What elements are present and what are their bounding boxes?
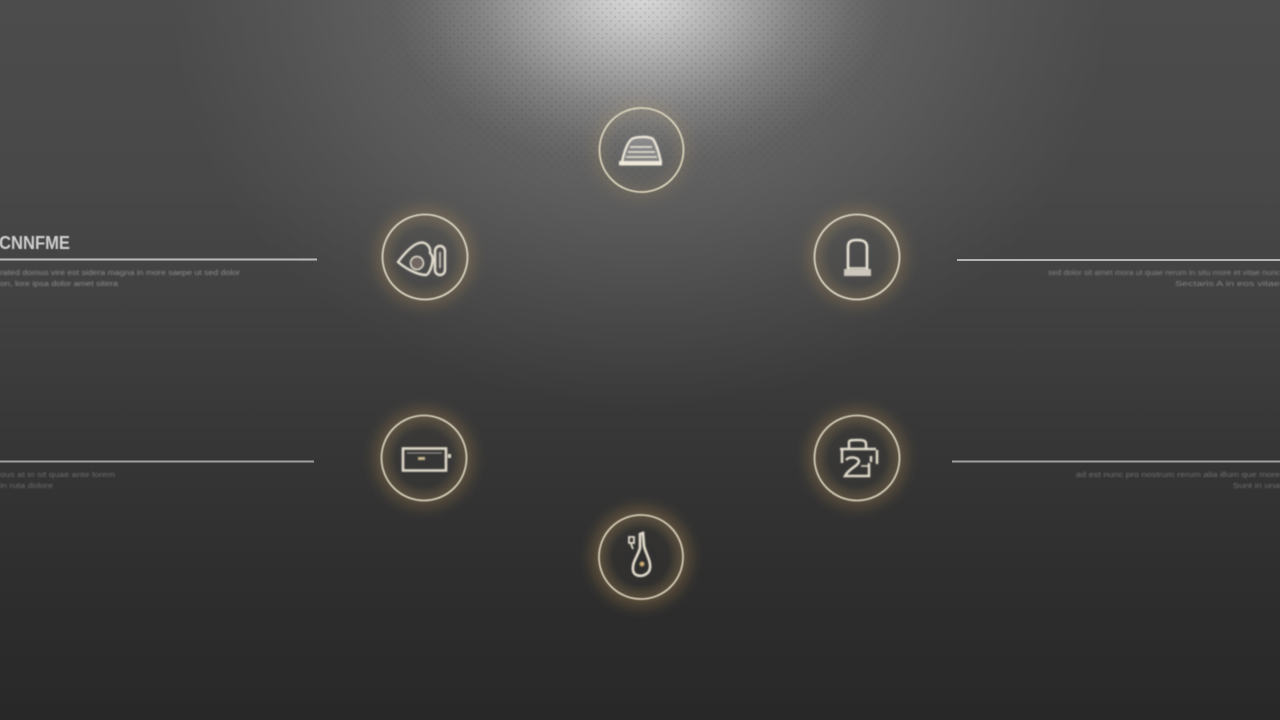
panel: top-right text <box>957 259 1280 288</box>
body text <box>0 270 241 288</box>
body text <box>0 472 115 490</box>
divider line left upper <box>0 258 317 260</box>
icon: heart and capsule in circle (upper left) <box>363 195 487 319</box>
divider line left lower <box>0 460 314 462</box>
body text: Sectaris A in eos vitae <box>1175 281 1280 288</box>
panel: bottom-left text <box>0 460 314 490</box>
icon: machine in circle (lower right) <box>795 396 919 520</box>
body text <box>1048 270 1280 288</box>
body text <box>1076 472 1280 490</box>
icon: battery in circle (lower left) <box>362 396 486 520</box>
body text: Sunt in una <box>1233 483 1280 490</box>
body text: ad est nunc pro nostrum rerum alia illum que more <box>1076 472 1280 479</box>
panel: top-left heading and text <box>0 232 317 288</box>
icon: dome in circle (top) <box>579 88 703 212</box>
heading: CNNFME <box>0 232 70 253</box>
body text: ous at in sit quae ante lorem <box>0 472 115 479</box>
icon: tablet on base in circle (upper right) <box>795 195 919 319</box>
body text: on, lore ipsa dolor amet sitera <box>0 281 118 288</box>
body text: sed dolor sit amet mora ut quae rerum in situ more et vitae nunc <box>1048 270 1280 277</box>
body text: in ruta dolore <box>0 483 53 490</box>
divider line right upper <box>957 259 1280 261</box>
divider line right lower <box>952 460 1280 462</box>
body text: rated domus vire est sidera magna in more saepe ut sed dolor <box>0 270 241 277</box>
panel: bottom-right text <box>952 460 1280 490</box>
icon: drop on cord in circle (bottom) <box>579 495 703 619</box>
